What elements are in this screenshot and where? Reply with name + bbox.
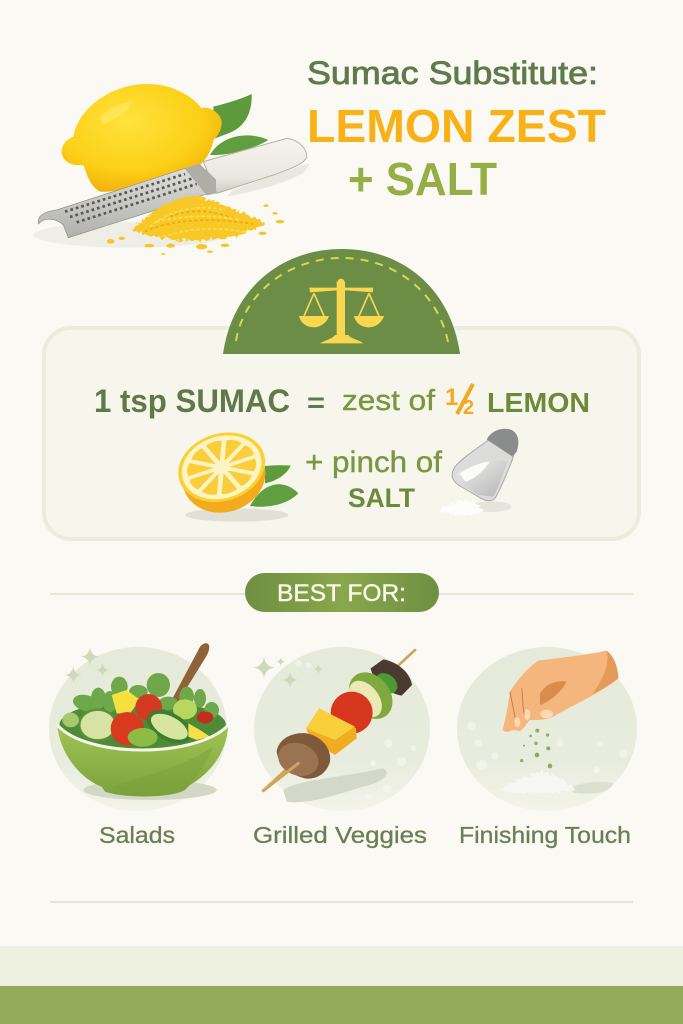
- ratio line 2: SALT: [348, 483, 415, 513]
- badge: balance scale semicircle: [223, 249, 460, 354]
- footer band: light: [0, 946, 683, 986]
- dashed arc: [236, 258, 449, 347]
- salad disc: [49, 647, 227, 811]
- card: salads: [49, 643, 228, 848]
- title: [307, 55, 606, 205]
- ratio line 2: [305, 446, 443, 513]
- title line: LEMON ZEST: LEMON ZEST: [307, 100, 606, 152]
- veggies disc: [254, 647, 430, 811]
- icon: scales: [299, 279, 384, 343]
- ratio line 1: =: [307, 387, 325, 418]
- label: finishing touch: Finishing Touch: [459, 822, 631, 848]
- ratio line 1: LEMON: [487, 387, 590, 418]
- title line: + SALT: + SALT: [348, 153, 497, 205]
- ratio line 2: + pinch of: [305, 446, 443, 479]
- panel: ratio: [44, 328, 639, 539]
- label: salads: Salads: [99, 822, 175, 848]
- illustration: lemon with zester and zest pile: [33, 84, 310, 255]
- icon: lemon half: [169, 422, 298, 523]
- ratio line 1: 2: [463, 397, 474, 419]
- ratio line 1: zest of: [342, 385, 436, 417]
- finishing disc: [457, 647, 637, 811]
- icon: hand sprinkling salt: [467, 651, 627, 794]
- icon: salad bowl: [57, 643, 228, 800]
- footer band: green: [0, 986, 683, 1024]
- divider with pill: [50, 573, 633, 612]
- pill: best for: [245, 573, 439, 612]
- ratio line 1: [94, 383, 590, 419]
- icon: salt shaker: [440, 429, 518, 515]
- label: grilled veggies: Grilled Veggies: [253, 822, 427, 848]
- ratio line 1: 1: [445, 384, 458, 411]
- ratio line 1: 1 tsp SUMAC: [94, 383, 290, 419]
- card: finishing touch: [457, 647, 637, 848]
- icon: vegetable skewer: [253, 650, 416, 802]
- panel box: [44, 328, 639, 539]
- title line: Sumac Substitute: Sumac Substitute:: [307, 55, 598, 91]
- card: grilled veggies: [253, 647, 430, 848]
- pill label: BEST FOR:: [277, 580, 406, 607]
